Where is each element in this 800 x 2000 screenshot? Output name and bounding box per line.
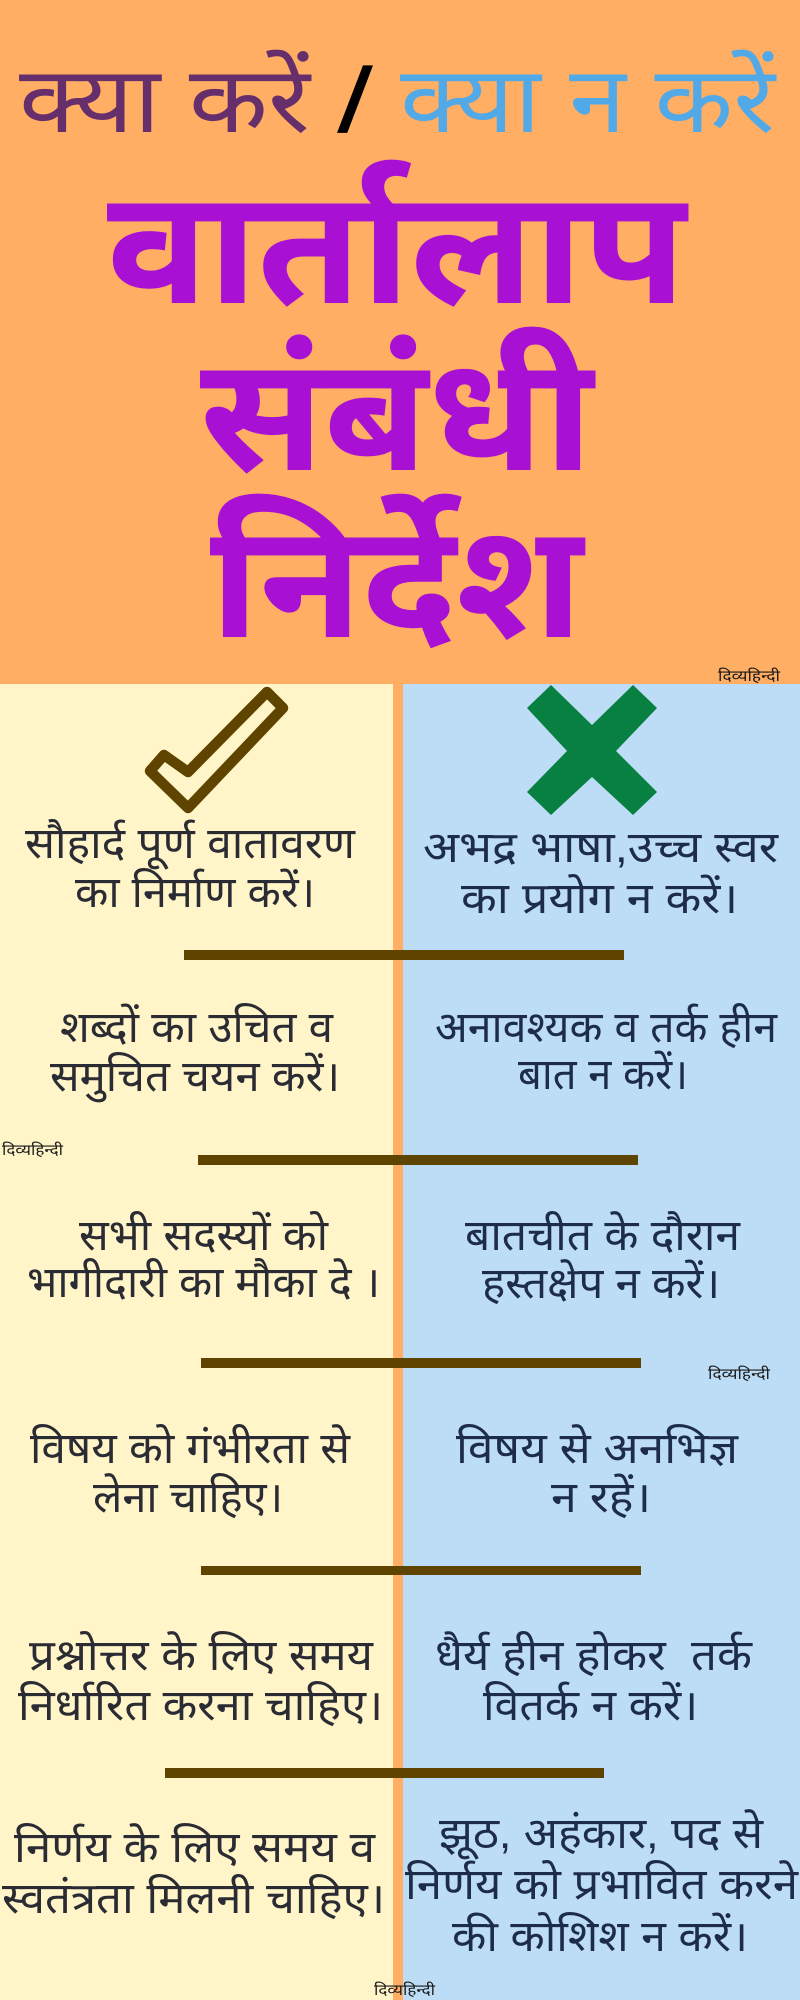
row 1: do — [25, 819, 356, 917]
row 5: don't — [435, 1631, 753, 1730]
row 2: do: समुचित चयन करें। — [50, 1052, 340, 1103]
title: निर्देश — [210, 492, 586, 671]
row 3: don't — [465, 1210, 741, 1308]
title — [107, 158, 689, 671]
row 5: do: प्रश्नोत्तर के लिए समय — [29, 1630, 374, 1680]
watermark: left: दिव्यहिन्दी — [2, 1142, 64, 1159]
row 2: don't: बात न करें। — [518, 1050, 688, 1099]
title: संबंधी — [200, 325, 596, 504]
row 4: don't — [456, 1423, 740, 1522]
row 6: do — [2, 1822, 385, 1923]
row 4: don't: विषय से अनभिज्ञ — [456, 1423, 740, 1473]
row 5: don't: धैर्य हीन होकर तर्क — [435, 1631, 753, 1680]
watermark: top right: दिव्यहिन्दी — [718, 668, 781, 685]
heading: do / don't: क्या करें — [19, 49, 313, 152]
row 2: don't: अनावश्यक व तर्क हीन — [435, 1003, 778, 1052]
row 6: don't — [405, 1808, 799, 1961]
heading: do / don't: क्या न करें — [400, 49, 778, 152]
row 1: don't — [423, 824, 780, 923]
row 1: don't: का प्रयोग न करें। — [461, 874, 738, 923]
row 6: do: स्वतंत्रता मिलनी चाहिए। — [2, 1874, 385, 1923]
heading: do / don't — [19, 49, 778, 152]
row 5: don't: वितर्क न करें। — [483, 1681, 698, 1730]
row 5: do: निर्धारित करना चाहिए। — [18, 1681, 383, 1730]
row 3: do: सभी सदस्यों को — [79, 1211, 329, 1260]
panel: don't column — [403, 684, 800, 2000]
row 3: don't: बातचीत के दौरान — [465, 1210, 741, 1260]
icon: cross mark — [527, 685, 657, 815]
row 1: do: सौहार्द पूर्ण वातावरण — [25, 819, 356, 870]
row 1: don't: अभद्र भाषा,उच्च स्वर — [423, 824, 780, 872]
row 5: do — [18, 1630, 383, 1730]
row 4: do: लेना चाहिए। — [93, 1472, 283, 1522]
row 6: don't: झूठ, अहंकार, पद से — [439, 1808, 764, 1860]
watermark: right middle: दिव्यहिन्दी — [708, 1366, 771, 1383]
heading: do / don't: / — [337, 50, 374, 152]
row 3: don't: हस्तक्षेप न करें। — [482, 1258, 720, 1308]
row 4: do: विषय को गंभीरता से — [30, 1423, 351, 1473]
watermark: bottom: दिव्यहिन्दी — [374, 1982, 436, 1999]
row 2: don't — [435, 1003, 778, 1099]
row 3: do: भागीदारी का मौका दे । — [27, 1257, 380, 1307]
row 4: don't: न रहें। — [551, 1473, 651, 1522]
icon: check mark — [150, 692, 283, 808]
panel: do column — [0, 684, 393, 2000]
row 1: do: का निर्माण करें। — [75, 868, 315, 917]
row 2: do — [50, 1003, 340, 1103]
row 3: do — [27, 1211, 380, 1307]
row 6: don't: की कोशिश न करें। — [452, 1912, 748, 1961]
row 4: do — [30, 1423, 351, 1522]
row 2: do: शब्दों का उचित व — [60, 1003, 334, 1052]
row 6: don't: निर्णय को प्रभावित करने — [405, 1859, 799, 1909]
row 6: do: निर्णय के लिए समय व — [14, 1822, 376, 1872]
title: वार्तालाप — [107, 158, 689, 337]
